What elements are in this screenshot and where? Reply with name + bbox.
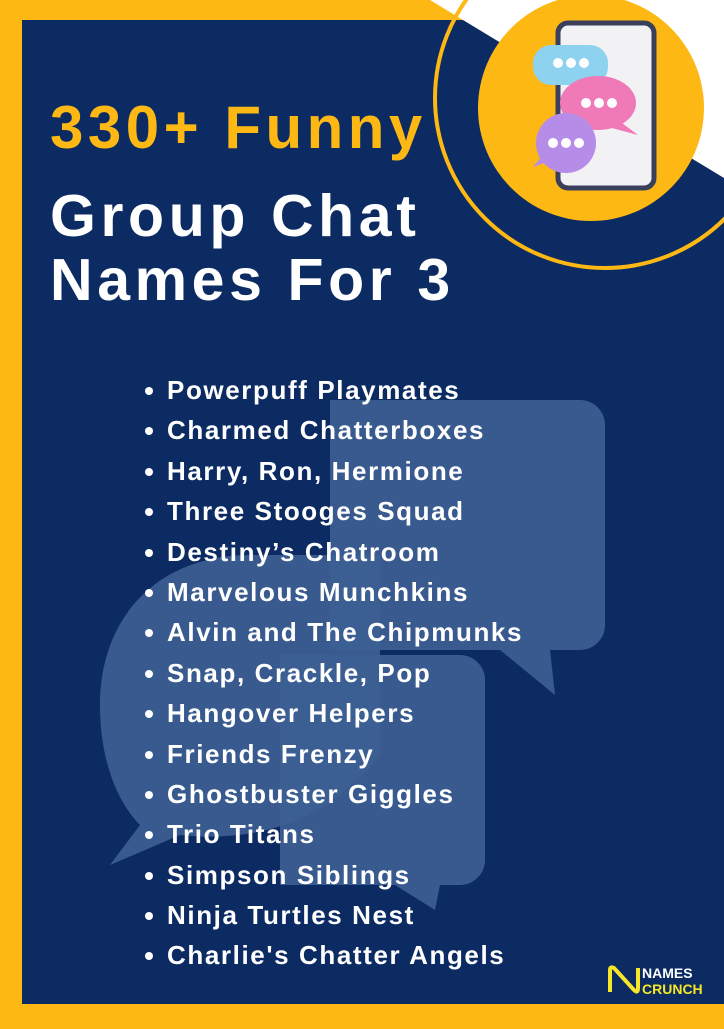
background speech bubbles <box>100 400 605 910</box>
list of names: Charlie's Chatter Angels <box>167 940 505 970</box>
title: Group Chat <box>50 183 420 249</box>
list of names: Marvelous Munchkins <box>167 577 469 607</box>
list of names: Ninja Turtles Nest <box>167 900 415 930</box>
list of names: Friends Frenzy <box>167 739 374 769</box>
list of names: Powerpuff Playmates <box>167 375 460 405</box>
logo: NAMES <box>642 965 693 981</box>
list of names: Simpson Siblings <box>167 860 411 890</box>
list of names: Trio Titans <box>167 819 316 849</box>
list of names: Alvin and The Chipmunks <box>167 617 523 647</box>
list of names <box>145 375 523 970</box>
list of names: Charmed Chatterboxes <box>167 415 485 445</box>
list of names: Hangover Helpers <box>167 698 415 728</box>
list of names: Destiny’s Chatroom <box>167 537 440 567</box>
list of names: Three Stooges Squad <box>167 496 465 526</box>
title: Names For 3 <box>50 247 455 313</box>
title <box>50 94 455 313</box>
list of names: Harry, Ron, Hermione <box>167 456 464 486</box>
logo <box>608 965 703 997</box>
icon: phone with chat bubbles <box>478 0 704 221</box>
list of names: Ghostbuster Giggles <box>167 779 455 809</box>
logo: CRUNCH <box>642 981 703 997</box>
list of names: Snap, Crackle, Pop <box>167 658 431 688</box>
title: 330+ Funny <box>50 94 427 161</box>
